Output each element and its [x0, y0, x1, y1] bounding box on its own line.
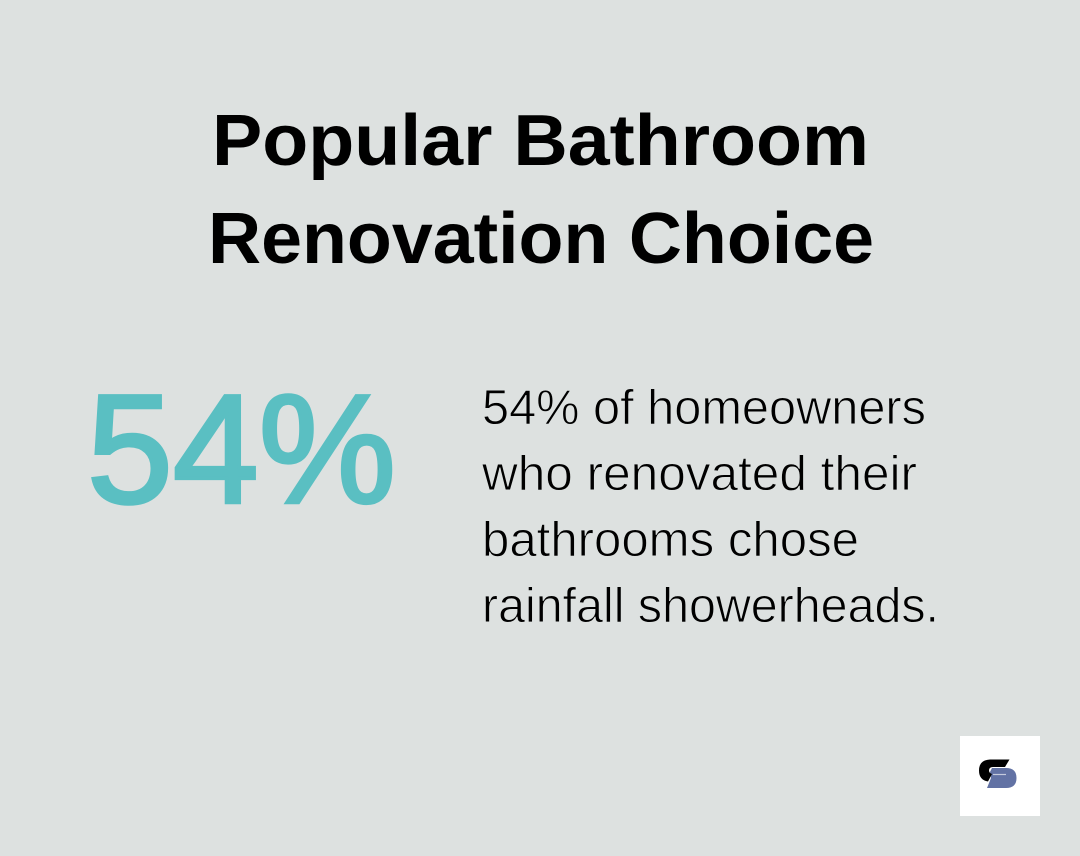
description text: who renovated their [481, 447, 917, 501]
logo badge [960, 736, 1040, 816]
description text: rainfall showerheads. [482, 579, 939, 633]
description text: bathrooms chose [482, 513, 859, 567]
title [208, 101, 874, 279]
icon: logo top black stroke [979, 760, 1010, 782]
description text [481, 381, 939, 633]
title: Renovation Choice [208, 199, 874, 279]
description text: 54% of homeowners [482, 381, 926, 435]
icon: logo bottom blue stroke [987, 768, 1016, 788]
title: Popular Bathroom [212, 101, 869, 181]
big statistic: 54%: 54% [87, 362, 396, 536]
icon: logo light stripe [993, 774, 1006, 776]
